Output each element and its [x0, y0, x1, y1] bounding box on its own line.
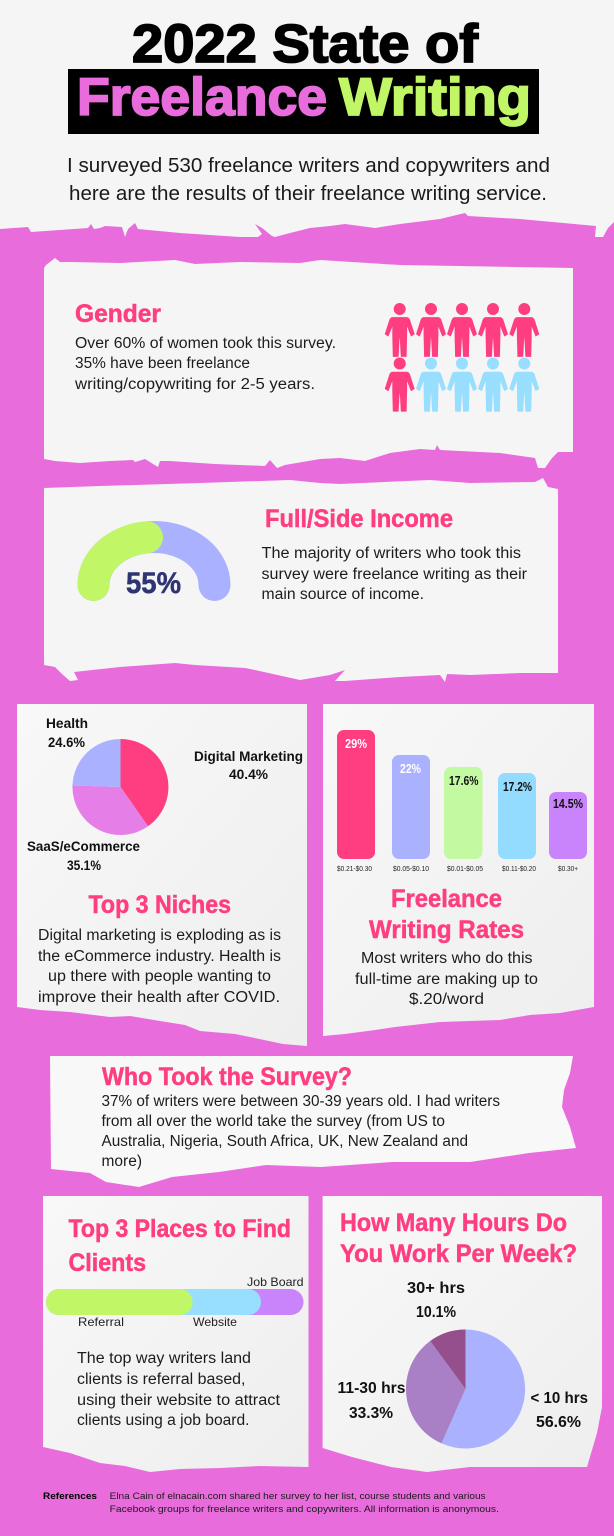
intro text: here are the results of their freelance writing service. — [69, 182, 547, 205]
gender description: Over 60% of women took this survey. — [75, 335, 336, 352]
references: References — [43, 1491, 97, 1502]
title line one: 2022 State of — [132, 14, 479, 74]
pie label: 11-30 hrs: 33.3% — [349, 1405, 393, 1422]
survey description — [102, 1093, 500, 1170]
hours heading — [340, 1209, 577, 1268]
hours paper — [323, 1196, 602, 1472]
survey description: more) — [102, 1153, 142, 1170]
title word: Freelance: Freelance — [77, 68, 327, 127]
hours pie chart — [406, 1329, 525, 1448]
panel: top 3 niches — [17, 704, 307, 1046]
bar label: website: Website — [193, 1315, 237, 1329]
panel: hours per week — [323, 1196, 602, 1472]
income description: The majority of writers who took this — [262, 545, 521, 562]
pie label: health: 24.6% — [48, 735, 85, 750]
pie label: 30+ hrs: 30+ hrs — [407, 1280, 465, 1297]
bar chart: 17.2% — [503, 780, 532, 794]
clients paper — [43, 1196, 308, 1472]
title — [68, 14, 539, 134]
clients heading — [68, 1215, 291, 1277]
bar chart: $0.05-$0.10 — [393, 866, 429, 873]
references: Elna Cain of elnacain.com shared her survey to her list, course students and various — [110, 1491, 486, 1502]
bar chart — [337, 730, 587, 873]
intro text — [67, 154, 550, 205]
survey paper — [50, 1056, 576, 1187]
rates heading — [369, 885, 524, 944]
bar chart: 29% — [345, 737, 367, 751]
stacked pill bar — [46, 1289, 304, 1315]
pie label: under 10 hrs — [530, 1390, 588, 1431]
bar chart: 17.6% — [449, 774, 478, 788]
income description: main source of income. — [262, 586, 424, 603]
pie label: health — [46, 716, 88, 750]
survey description: from all over the world take the survey (from US to — [102, 1113, 445, 1130]
title banner — [68, 69, 539, 134]
pie label: under 10 hrs: < 10 hrs — [530, 1390, 588, 1407]
panel: gender — [44, 258, 573, 468]
hours heading: You Work Per Week? — [340, 1240, 577, 1268]
clients heading: Clients — [68, 1249, 146, 1277]
pie label: saas/ecommerce — [27, 839, 140, 873]
pie label: digital marketing — [194, 749, 303, 782]
gender paper — [44, 258, 573, 468]
clients description: clients is referral based, — [77, 1371, 246, 1388]
survey heading: Who Took the Survey? — [102, 1063, 352, 1091]
bar label: job board: Job Board — [247, 1275, 304, 1289]
bar chart: $0.11-$0.20 — [502, 866, 536, 873]
panel: who took the survey — [50, 1056, 576, 1187]
gauge value: 55% — [126, 567, 181, 600]
rates description: full-time are making up to — [355, 971, 538, 988]
niches description: up there with people wanting to — [48, 968, 271, 985]
intro text: I surveyed 530 freelance writers and copywriters and — [67, 154, 550, 177]
references: Facebook groups for freelance writers and copywriters. All information is anonymous. — [110, 1504, 499, 1515]
niches description: the eCommerce industry. Health is — [38, 948, 281, 965]
rates heading: Writing Rates — [369, 916, 524, 944]
hours heading: How Many Hours Do — [340, 1209, 567, 1237]
pie label: 30+ hrs: 10.1% — [416, 1304, 456, 1321]
pie label: saas/ecommerce: SaaS/eCommerce — [27, 839, 140, 854]
gender description: 35% have been freelance — [75, 355, 250, 372]
pie label: 30+ hrs — [407, 1280, 465, 1321]
income description: survey were freelance writing as their — [262, 566, 527, 583]
clients description: using their website to attract — [77, 1392, 281, 1409]
income heading: Full/Side Income — [265, 505, 453, 533]
rates description: Most writers who do this — [361, 950, 533, 967]
rates heading: Freelance — [391, 885, 502, 913]
panel: top 3 places to find clients — [43, 1196, 308, 1472]
clients description: The top way writers land — [77, 1350, 251, 1367]
pie label: saas/ecommerce: 35.1% — [67, 858, 101, 873]
income paper — [44, 478, 558, 682]
clients heading: Top 3 Places to Find — [68, 1215, 291, 1243]
gender description: writing/copywriting for 2-5 years. — [74, 376, 315, 393]
pie label: health: Health — [46, 716, 88, 731]
rates description — [355, 950, 538, 1008]
survey description: 37% of writers were between 30-39 years old. I had writers — [102, 1093, 500, 1110]
clients description: clients using a job board. — [77, 1412, 250, 1429]
niches pie chart — [72, 739, 168, 835]
references — [43, 1491, 499, 1515]
niches description — [38, 927, 281, 1006]
gender description — [74, 335, 336, 393]
bar chart: 14.5% — [553, 797, 583, 811]
niches heading: Top 3 Niches — [88, 891, 231, 919]
rates description: $.20/word — [409, 991, 484, 1008]
pie label: 11-30 hrs: 11-30 hrs — [338, 1380, 406, 1397]
gauge chart — [93, 537, 214, 585]
title word: Writing: Writing — [339, 68, 531, 127]
pie label: digital marketing: Digital Marketing — [194, 749, 303, 764]
niches description: Digital marketing is exploding as is — [38, 927, 281, 944]
pie label: 11-30 hrs — [338, 1380, 406, 1422]
survey description: Australia, Nigeria, South Africa, UK, New Zealand and — [102, 1133, 468, 1150]
niches description: improve their health after COVID. — [38, 989, 280, 1006]
pie label: digital marketing: 40.4% — [229, 767, 268, 782]
bar chart: $0.01-$0.05 — [447, 866, 483, 873]
income description — [262, 545, 527, 603]
clients description — [77, 1350, 281, 1429]
bar chart: $0.30+ — [558, 866, 578, 873]
bar label: referral: Referral — [78, 1315, 124, 1329]
pie label: under 10 hrs: 56.6% — [536, 1414, 581, 1431]
niches paper — [17, 704, 307, 1046]
bar chart: 22% — [400, 762, 421, 776]
panel: full/side income — [44, 478, 558, 682]
icon: people pictogram — [385, 304, 539, 411]
bar chart: $0.21-$0.30 — [337, 866, 372, 873]
panel: freelance writing rates — [323, 704, 594, 1036]
rates paper — [323, 704, 594, 1036]
gender heading: Gender — [75, 300, 161, 328]
